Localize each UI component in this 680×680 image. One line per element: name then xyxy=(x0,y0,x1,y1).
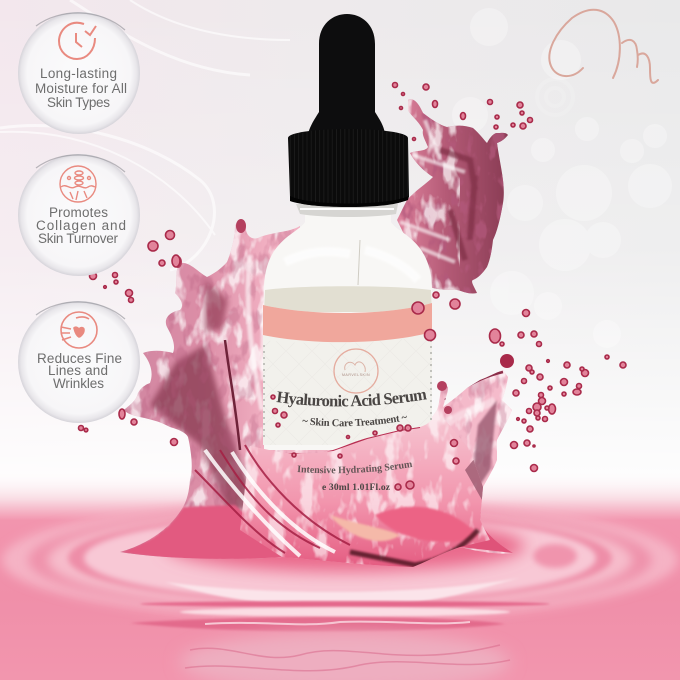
benefit badge: promotes collagen xyxy=(18,154,140,276)
label text xyxy=(276,391,427,493)
benefit badge: reduces fine lines xyxy=(18,301,140,423)
glass bottle xyxy=(264,212,432,450)
badge text: Promotes xyxy=(49,205,108,220)
badge text: Moisture for All xyxy=(35,81,127,96)
collar xyxy=(296,204,398,217)
descriptor: Intensive Hydrating Serum xyxy=(297,462,412,476)
volume: e 30ml 1.01Fl.oz xyxy=(322,483,391,493)
upper right splash xyxy=(397,99,508,294)
brand logo on label xyxy=(334,349,378,393)
brand monogram xyxy=(549,10,658,83)
icon: skin cells xyxy=(60,166,96,202)
water surface with ripples xyxy=(0,470,680,680)
rubber dropper bulb xyxy=(308,14,385,134)
splash, front of bottle xyxy=(195,420,515,570)
dropper bottle xyxy=(263,14,432,450)
brand logo on label: MARVELSKIN xyxy=(342,373,370,377)
badge text: Skin Types xyxy=(47,95,110,110)
droplets xyxy=(78,82,626,490)
ribbed black cap xyxy=(288,129,409,207)
badge text: Collagen and xyxy=(36,218,126,233)
crown tips xyxy=(174,219,514,414)
badge text xyxy=(37,351,122,391)
icon: face with wrinkles xyxy=(61,312,97,348)
main splash crown, back wall xyxy=(115,215,515,570)
badge text: Skin Turnover xyxy=(38,231,118,246)
label xyxy=(263,303,432,445)
badge text: Long-lasting xyxy=(40,66,117,81)
benefit badge: long-lasting moisture xyxy=(18,12,140,134)
badge text xyxy=(36,205,126,246)
badge text: Reduces Fine xyxy=(37,351,122,366)
badge text: Wrinkles xyxy=(53,376,104,391)
badge text xyxy=(35,66,127,110)
peach label band xyxy=(263,303,432,342)
streaks blending the wall into the crown base xyxy=(195,445,350,556)
badge text: Lines and xyxy=(48,363,108,378)
subtitle: ~ Skin Care Treatment ~ xyxy=(302,416,407,426)
icon: clock with check xyxy=(59,23,96,59)
product name: Hyaluronic Acid Serum xyxy=(276,391,427,408)
